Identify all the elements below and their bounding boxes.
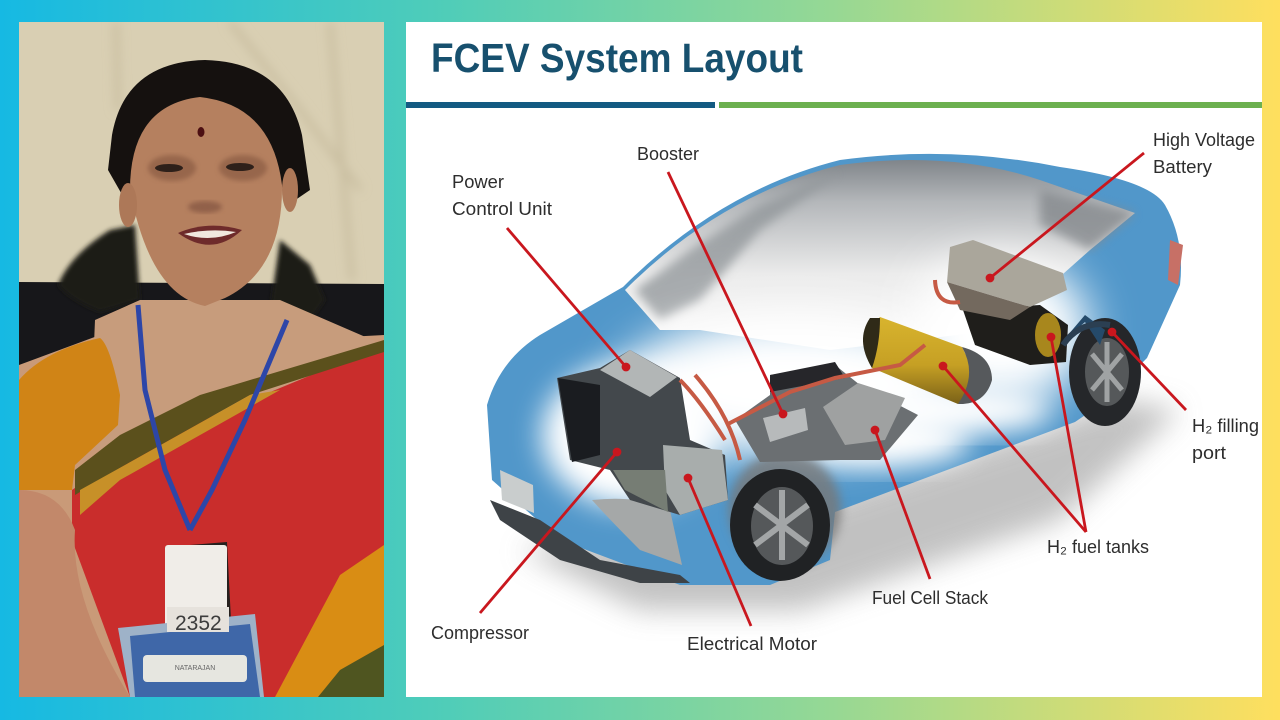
labels: Compressor <box>431 622 529 643</box>
labels: Battery <box>1153 156 1213 177</box>
labels: Electrical Motor <box>687 633 817 654</box>
fuel tank: rear <box>963 305 1068 365</box>
fuel tank: main <box>863 317 992 404</box>
labels: Booster <box>637 143 699 164</box>
leader lines <box>480 153 1186 626</box>
power control unit and motor <box>557 350 728 515</box>
badge name: NATARAJAN <box>175 665 215 672</box>
panel: portrait photo <box>19 22 384 697</box>
labels: H₂ fuel tanks <box>1047 536 1149 557</box>
labels: Fuel Cell Stack <box>872 587 989 608</box>
labels: port <box>1192 442 1226 463</box>
labels <box>431 129 1259 654</box>
labels: Power <box>452 171 504 192</box>
fuel cell stack and booster <box>735 362 918 462</box>
panel: FCEV slide <box>406 22 1262 697</box>
title rule <box>406 102 1262 108</box>
labels: High Voltage <box>1153 129 1255 150</box>
high voltage battery <box>947 240 1067 307</box>
badge number: 2352 <box>175 612 222 635</box>
title: FCEV System Layout <box>431 35 803 81</box>
labels: H₂ filling <box>1192 415 1259 436</box>
labels: Control Unit <box>452 198 552 219</box>
car illustration <box>487 154 1183 610</box>
